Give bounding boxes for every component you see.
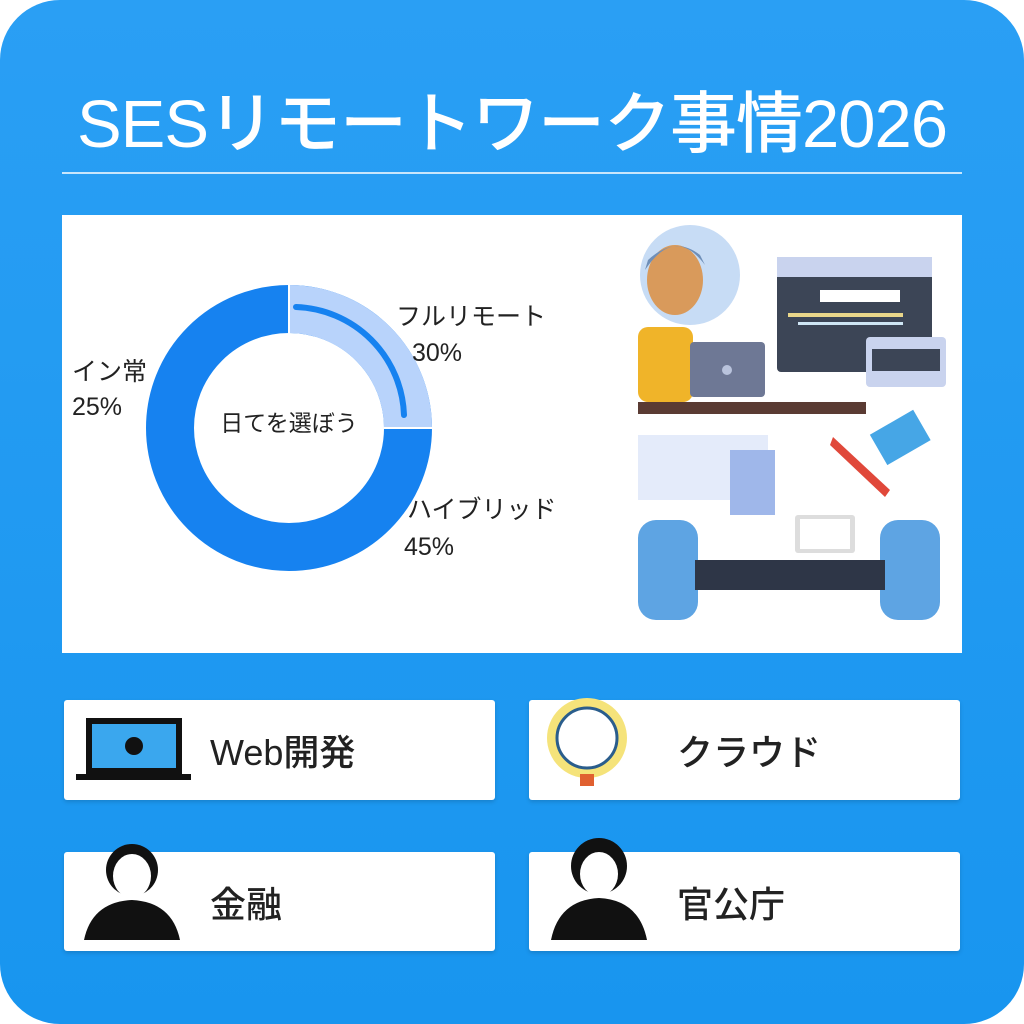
illustration: remote work bbox=[638, 225, 946, 620]
donut chart: 日てを選ぼう bbox=[220, 410, 358, 436]
title: SESリモートワーク事情2026 bbox=[77, 87, 947, 162]
panel: chart and illustration bbox=[62, 215, 962, 653]
card: finance bbox=[64, 852, 495, 951]
icon: person bbox=[84, 844, 180, 940]
card: Web development: Web開発 bbox=[210, 732, 355, 773]
card: cloud: クラウド bbox=[677, 732, 821, 773]
donut chart bbox=[72, 285, 557, 571]
donut chart: ハイブリッド bbox=[407, 496, 557, 524]
icon: badge bbox=[547, 698, 627, 786]
icon: person headset bbox=[551, 838, 647, 940]
donut chart: イン常 bbox=[72, 358, 147, 386]
card: Web development bbox=[64, 700, 495, 800]
donut chart: 45% bbox=[404, 533, 454, 561]
donut chart: 30% bbox=[412, 339, 462, 367]
icon: laptop bbox=[76, 718, 191, 780]
card: cloud bbox=[529, 700, 960, 800]
donut chart: 25% bbox=[72, 393, 122, 421]
card: government bbox=[529, 852, 960, 951]
donut chart: フルリモート bbox=[396, 303, 546, 331]
card: government: 官公庁 bbox=[677, 884, 785, 924]
card: finance: 金融 bbox=[210, 884, 282, 924]
